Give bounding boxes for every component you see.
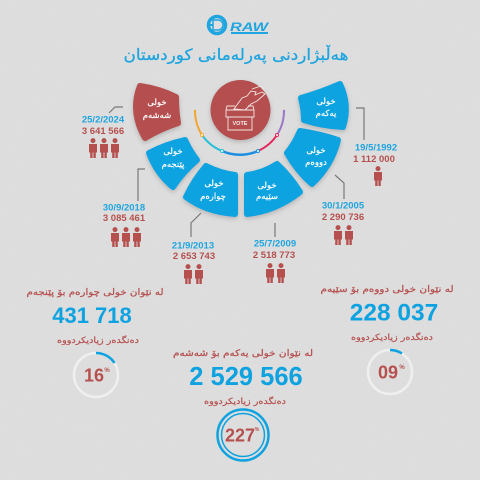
logo	[208, 16, 270, 34]
panel: fourth to fifth	[26, 288, 164, 397]
title: هەڵبژاردنی پەرلەمانی کوردستان	[124, 45, 348, 65]
stat: session 2: 2 290 736	[322, 212, 364, 223]
stat: session 1	[353, 142, 397, 186]
vote circle icon: VOTE	[233, 121, 248, 127]
segment 1	[301, 84, 346, 127]
panel: first to sixth	[173, 349, 313, 460]
segment 3: سێیەم	[256, 192, 278, 202]
segment 5: پێنجەم	[162, 160, 185, 170]
stat: session 4	[172, 240, 215, 284]
stat: session 2	[322, 200, 365, 245]
stat: session 1: 1 112 000	[353, 154, 395, 165]
stat: session 3: 2 518 773	[253, 250, 295, 261]
segment 3: خولی	[257, 181, 277, 191]
panel: second to third: لە نێوان خولی دووەم بۆ سێیەم	[320, 285, 454, 295]
panel: fourth to fifth: %	[104, 368, 110, 374]
panel: first to sixth: 227	[225, 426, 255, 446]
panel: first to sixth: لە نێوان خولی یەکەم بۆ شەشەم	[173, 349, 313, 359]
stat: session 1: 19/5/1992	[355, 142, 397, 154]
stat: session 5	[103, 202, 146, 247]
stat: session 6: 3 641 566	[82, 126, 124, 137]
segment 2: خولی	[306, 146, 326, 156]
segment 6: شەشەم	[143, 111, 171, 121]
stat: session 2: 30/1/2005	[322, 200, 365, 212]
segment 2: دووەم	[305, 158, 327, 168]
logo: RAW	[230, 22, 270, 34]
segment 5: خولی	[163, 147, 183, 157]
segment 5	[149, 140, 197, 187]
segment 4: خولی	[204, 179, 224, 189]
vote circle icon	[210, 80, 270, 140]
panel: second to third: 228 037	[350, 300, 438, 326]
leader lines	[109, 107, 364, 237]
panel: fourth to fifth: دەنگدەر زیادیکردووە	[57, 335, 139, 346]
panel: second to third: دەنگدەر زیادیکردووە	[351, 332, 433, 343]
segment 3	[247, 164, 300, 214]
stat: session 6	[82, 114, 125, 158]
segment 6	[136, 86, 178, 138]
segment 6: خولی	[147, 98, 167, 108]
panel: second to third: %	[399, 365, 405, 371]
stat: session 4: 21/9/2013	[172, 240, 214, 252]
segment 2	[287, 131, 338, 184]
panel: second to third: 09	[378, 362, 398, 382]
panel: fourth to fifth: لە نێوان خولی چوارەم بۆ پێنجەم	[26, 288, 164, 298]
segment 4: چوارەم	[200, 192, 226, 202]
panel: first to sixth: دەنگدەر زیادیکردووە	[204, 396, 286, 407]
segment 4	[186, 166, 235, 214]
panel: fourth to fifth: 431 718	[52, 303, 132, 328]
panel: fourth to fifth: 16	[84, 366, 104, 386]
stat: session 6: 25/2/2024	[82, 114, 125, 126]
stat: session 3	[253, 238, 296, 283]
panel: first to sixth: %	[255, 427, 260, 433]
stat: session 4: 2 653 743	[173, 251, 215, 262]
stat: session 5: 3 085 461	[103, 213, 146, 224]
stat: session 5: 30/9/2018	[103, 202, 145, 214]
arc timeline	[194, 110, 285, 155]
panel: first to sixth: 2 529 566	[189, 363, 303, 391]
segment 1: خولی	[316, 97, 336, 107]
panel: second to third	[320, 285, 454, 394]
segment 1: یەکەم	[316, 109, 337, 119]
stat: session 3: 25/7/2009	[254, 238, 296, 250]
